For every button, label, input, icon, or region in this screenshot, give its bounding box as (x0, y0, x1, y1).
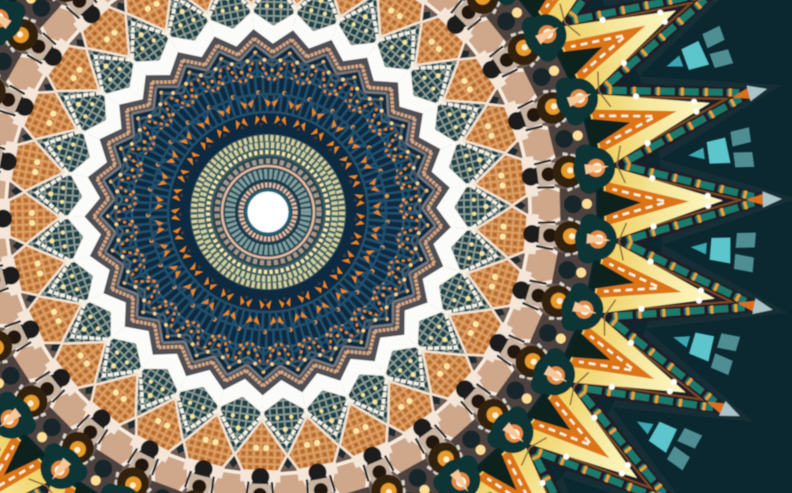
white zigzag band and fringe (68, 12, 467, 412)
teal kite and crosswalk tile ring (0, 0, 597, 493)
tile ring base disk (0, 0, 596, 493)
navy lattice disk (92, 36, 444, 388)
central mandala rings (190, 134, 346, 290)
orange pentagons and trees (0, 0, 624, 493)
